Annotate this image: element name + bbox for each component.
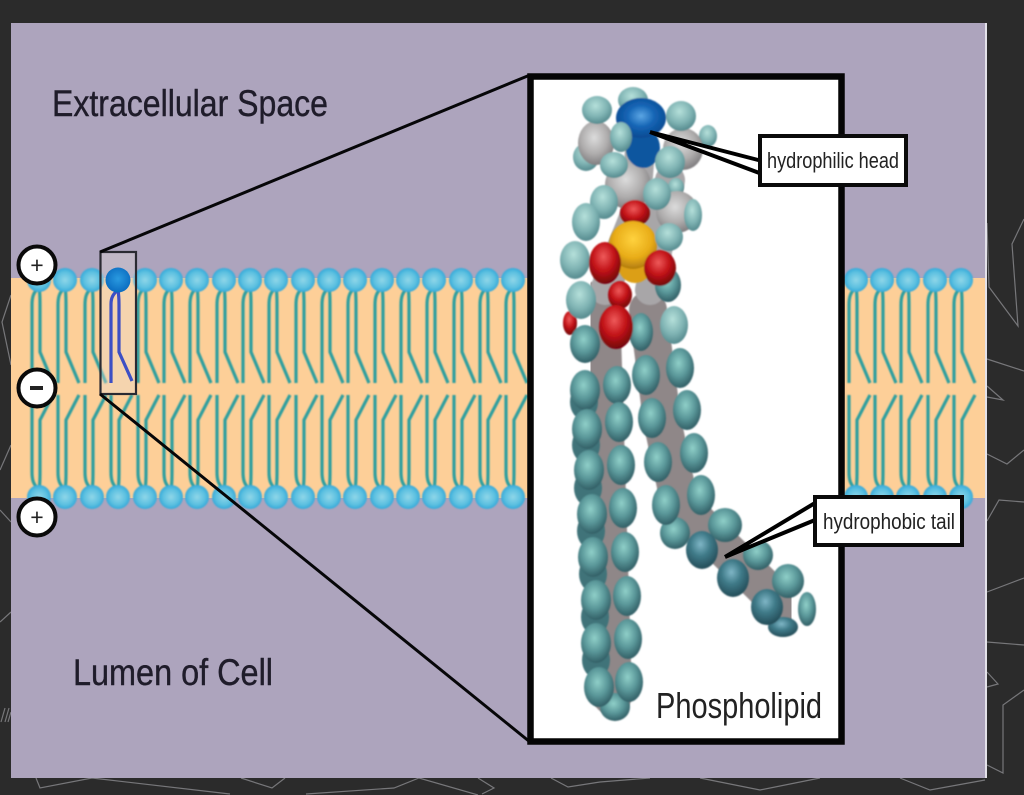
callout: hydrophobic tail: hydrophobic tail [823, 509, 955, 534]
label: Extracellular Space: Extracellular Space [52, 83, 328, 124]
lipid bilayer: right section [844, 268, 975, 509]
charge marker: bottom plus [18, 498, 56, 536]
callout: hydrophobic tail [725, 497, 962, 557]
charge marker: bottom plus: + [30, 504, 44, 530]
charge marker: top plus [18, 246, 56, 284]
membrane band [11, 278, 985, 498]
dark slide background lines [0, 219, 1024, 795]
label: Lumen of Cell: Lumen of Cell [73, 652, 273, 693]
callout: hydrophilic head [650, 132, 906, 185]
molecule: tail spheres [570, 306, 816, 721]
panel: phospholipid detail [530, 76, 842, 742]
label: Phospholipid: Phospholipid [656, 685, 822, 726]
molecule: grey backbone [600, 150, 782, 695]
callout: hydrophilic head: hydrophilic head [767, 148, 899, 173]
charge marker: minus [18, 370, 56, 406]
lipid bilayer: left section [27, 268, 527, 509]
highlighted phospholipid with selection box [100, 252, 136, 394]
molecule: head group spheres [560, 87, 717, 363]
charge marker: top plus: + [30, 252, 44, 278]
zoom lines to phospholipid panel [100, 75, 530, 742]
